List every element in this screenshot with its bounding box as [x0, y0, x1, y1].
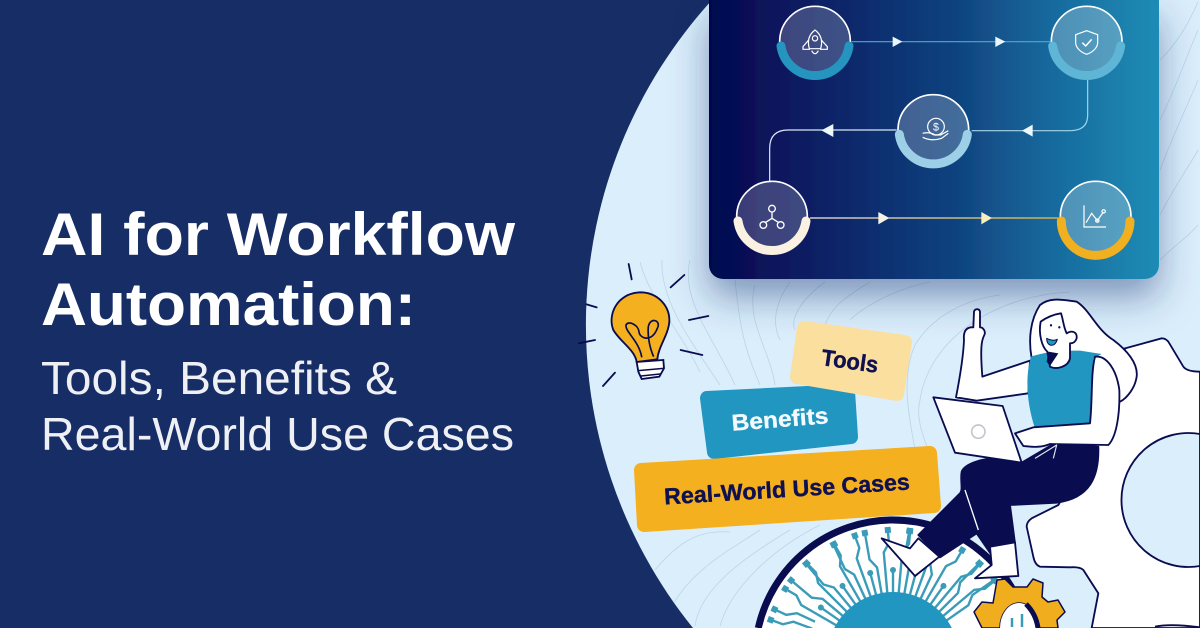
bulb rays: [579, 264, 708, 386]
tag: tools: [797, 328, 905, 394]
circuit disc: [758, 520, 1028, 628]
small orange gear: [974, 579, 1065, 628]
hair: [1030, 300, 1137, 402]
tag: real-world use cases: Real-World Use Cases: [663, 469, 911, 509]
node: chart: [1060, 181, 1131, 255]
node: shield: [1051, 6, 1122, 77]
person with laptop: [882, 300, 1137, 578]
circuit traces: [767, 527, 1000, 628]
title: Tools, Benefits &: [41, 352, 397, 404]
tag: tools: Tools: [820, 344, 880, 378]
raised arm: [956, 309, 1030, 401]
node: money: $: [933, 122, 939, 134]
title: AI for Workflow: [41, 201, 515, 268]
node: money: [898, 95, 969, 165]
contour lines: [640, 2, 1198, 626]
title: Real-World Use Cases: [41, 408, 514, 460]
title: [41, 201, 515, 460]
title: Automation:: [41, 271, 416, 338]
torso: [1027, 351, 1102, 428]
tag: benefits: [707, 391, 851, 452]
gear hole: [1121, 433, 1200, 567]
panel: workflow diagram: [709, 0, 1159, 279]
node: network: [737, 181, 807, 252]
large gear: [1027, 338, 1200, 628]
shoes: [882, 538, 939, 576]
node: rocket: [780, 6, 850, 77]
face: [1040, 313, 1077, 368]
connector lines and arrows: [770, 37, 1088, 224]
tag: real-world use cases: [641, 453, 934, 525]
legs: [918, 444, 1098, 557]
tag: benefits: Benefits: [731, 402, 829, 436]
light blue circle backdrop: [586, 0, 1200, 628]
icon: light bulb: [579, 264, 708, 386]
right arm: [1015, 357, 1119, 447]
laptop: [933, 397, 1022, 463]
